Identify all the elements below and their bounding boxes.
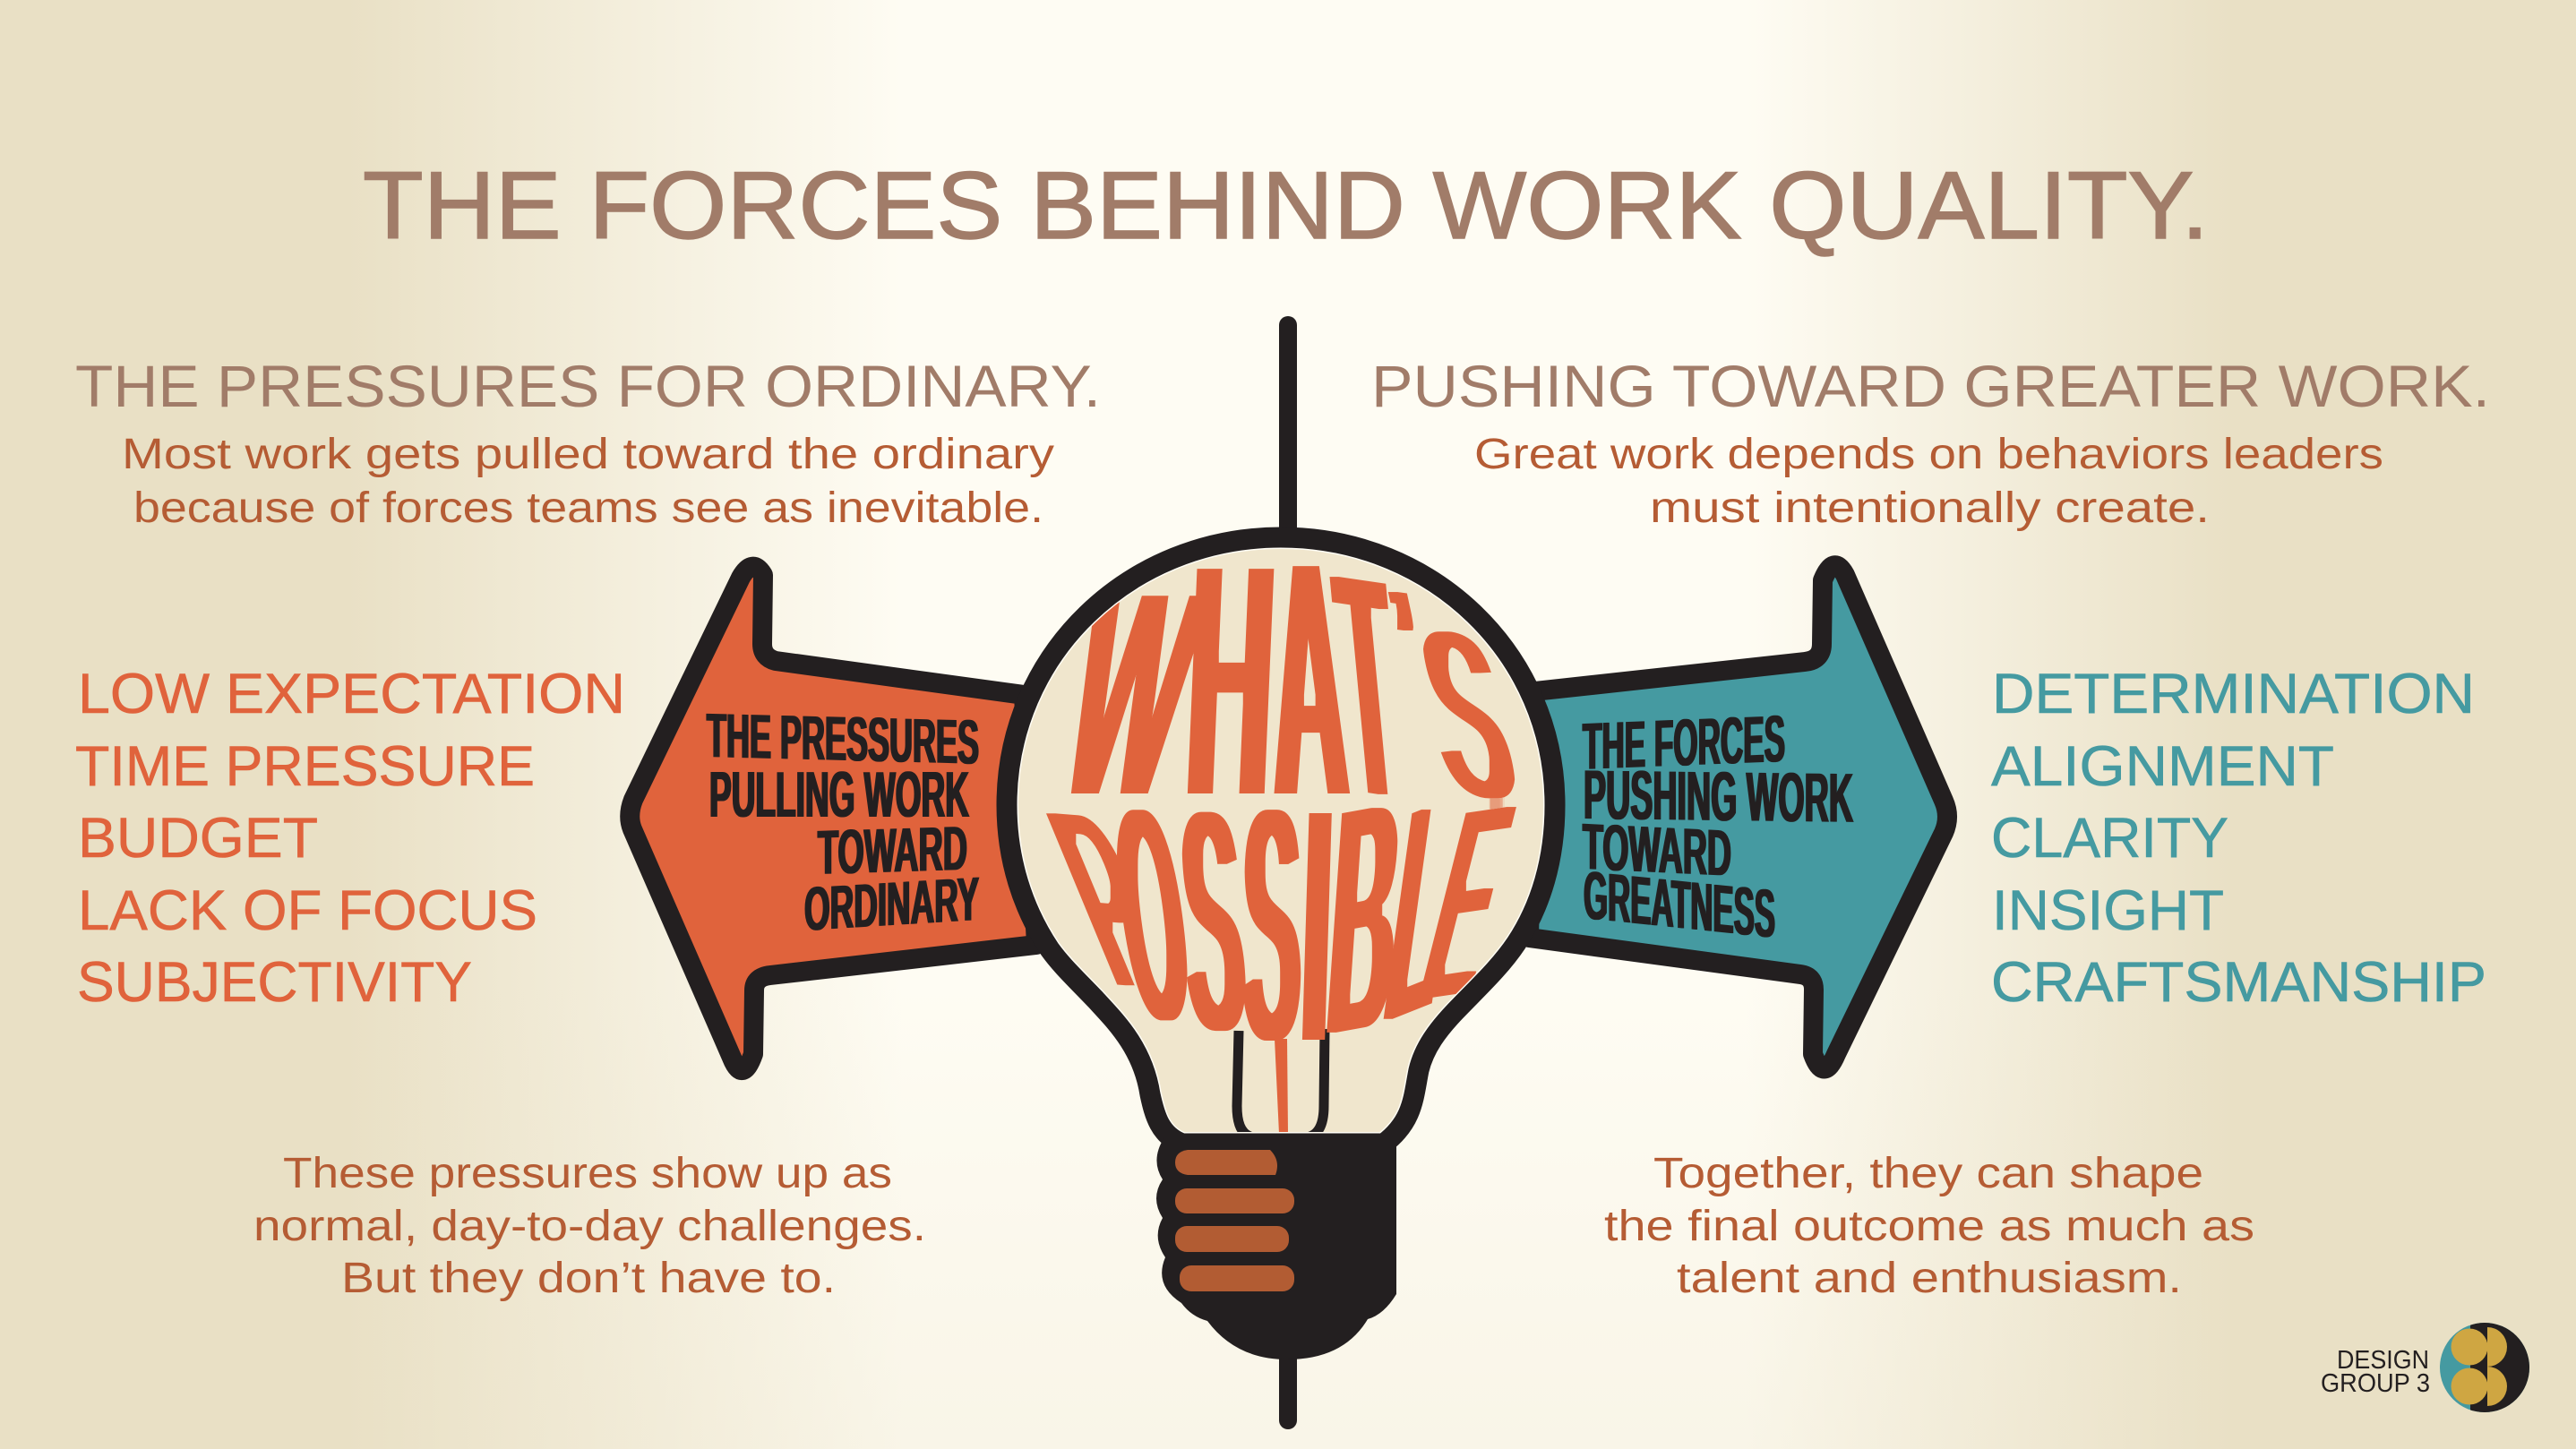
list: pressures: BUDGET	[78, 807, 318, 870]
warped lettering: what's possible: S	[1243, 734, 1301, 1115]
text block: bottom left	[253, 1150, 926, 1302]
warped lettering: what's possible: I	[1298, 733, 1336, 1119]
warped lettering: what's possible: L	[1371, 723, 1469, 1095]
text block: bottom left: These pressures show up as	[283, 1150, 892, 1197]
base threads	[1175, 1150, 1294, 1291]
warped lettering: what's possible: S	[1175, 739, 1251, 1105]
list: forces: DETERMINATION	[1992, 663, 2475, 725]
heading: pushing toward greater work: PUSHING TOWARD GREATER WORK.	[1371, 353, 2490, 419]
bulb inner highlight	[1007, 537, 1555, 1144]
intro text right: Great work depends on behaviors leaders	[1474, 431, 2383, 478]
logo mark	[2440, 1323, 2529, 1412]
intro text right	[1474, 431, 2383, 532]
warped lettering: what's possible	[1017, 487, 1535, 1119]
list: pressures: TIME PRESSURE	[75, 735, 535, 798]
warped lettering: what's possible: O	[1100, 741, 1204, 1090]
list: forces: INSIGHT	[1992, 879, 2224, 942]
arrow label right	[1583, 701, 1853, 953]
list: pressures: SUBJECTIVITY	[77, 951, 472, 1014]
logo: Design Group 3	[2322, 1323, 2529, 1412]
arrow label left: ORDINARY	[804, 863, 979, 944]
logo wordmark: DESIGN	[2337, 1346, 2429, 1375]
list: forces	[1991, 663, 2486, 1014]
logo wordmark	[2321, 1346, 2430, 1398]
arrow label left: PULLING WORK	[709, 759, 969, 831]
arrow label left: TOWARD	[818, 813, 967, 887]
heading: pressures for ordinary: THE PRESSURES FOR ORDINARY.	[75, 353, 1101, 419]
warped lettering: what's possible: S	[1404, 567, 1533, 862]
text block: bottom left: But they don’t have to.	[341, 1255, 836, 1302]
list: pressures: LOW EXPECTATION	[78, 663, 625, 725]
intro text left: Most work gets pulled toward the ordinary	[122, 431, 1054, 478]
logo wordmark: GROUP 3	[2321, 1369, 2430, 1398]
warped lettering: what's possible: E	[1399, 739, 1535, 1067]
arrow: right, pushing toward greatness: PUSHING WORK	[1584, 755, 1853, 837]
warped lettering: what's possible: H	[1181, 489, 1281, 872]
warped lettering: what's possible: W	[1039, 525, 1227, 863]
warped lettering: what's possible: A	[1267, 487, 1352, 873]
list: forces: ALIGNMENT	[1991, 735, 2334, 798]
arrow: left, pulling toward ordinary	[630, 567, 1036, 1070]
arrow label right: THE FORCES	[1583, 701, 1785, 784]
filament tail	[1275, 1039, 1288, 1134]
text block: bottom right: talent and enthusiasm.	[1677, 1255, 2182, 1302]
warped lettering: what's possible: B	[1319, 726, 1409, 1111]
icon: light bulb	[1007, 487, 1555, 1359]
vertical line: bottom	[1279, 1343, 1297, 1420]
panel: right heading and intro	[1371, 353, 2490, 532]
arrow: right, pushing toward greatness	[1529, 565, 1947, 1069]
text block: bottom right	[1604, 1150, 2254, 1302]
panel: left heading and intro	[75, 353, 1101, 532]
arrow label left: THE PRESSURES	[707, 700, 979, 777]
list: forces: CRAFTSMANSHIP	[1991, 951, 2486, 1014]
intro text right: must intentionally create.	[1650, 484, 2210, 532]
bulb base	[1156, 1137, 1396, 1359]
intro text left	[122, 431, 1054, 532]
text block: bottom left: normal, day-to-day challenges.	[253, 1203, 926, 1250]
bulb glass	[1007, 537, 1555, 1144]
arrow label right: GREATNESS	[1584, 857, 1775, 953]
vertical line: top	[1279, 325, 1297, 546]
arrow label right: TOWARD	[1583, 810, 1731, 890]
filament	[1237, 1029, 1325, 1137]
list: forces: CLARITY	[1991, 807, 2228, 870]
text block: bottom right: Together, they can shape	[1653, 1150, 2203, 1197]
bulb outline	[1007, 537, 1555, 1144]
warped lettering: what's possible: ’	[1376, 548, 1442, 743]
warped lettering: what's possible: P	[1017, 751, 1199, 1051]
arrow label left	[707, 700, 979, 944]
list: pressures: LACK OF FOCUS	[78, 879, 537, 942]
title: THE FORCES BEHIND WORK QUALITY.	[363, 151, 2209, 259]
text block: bottom right: the final outcome as much as	[1604, 1203, 2254, 1250]
list: pressures	[75, 663, 625, 1014]
warped lettering: what's possible: T	[1326, 502, 1410, 872]
intro text left: because of forces teams see as inevitable.	[133, 484, 1043, 532]
